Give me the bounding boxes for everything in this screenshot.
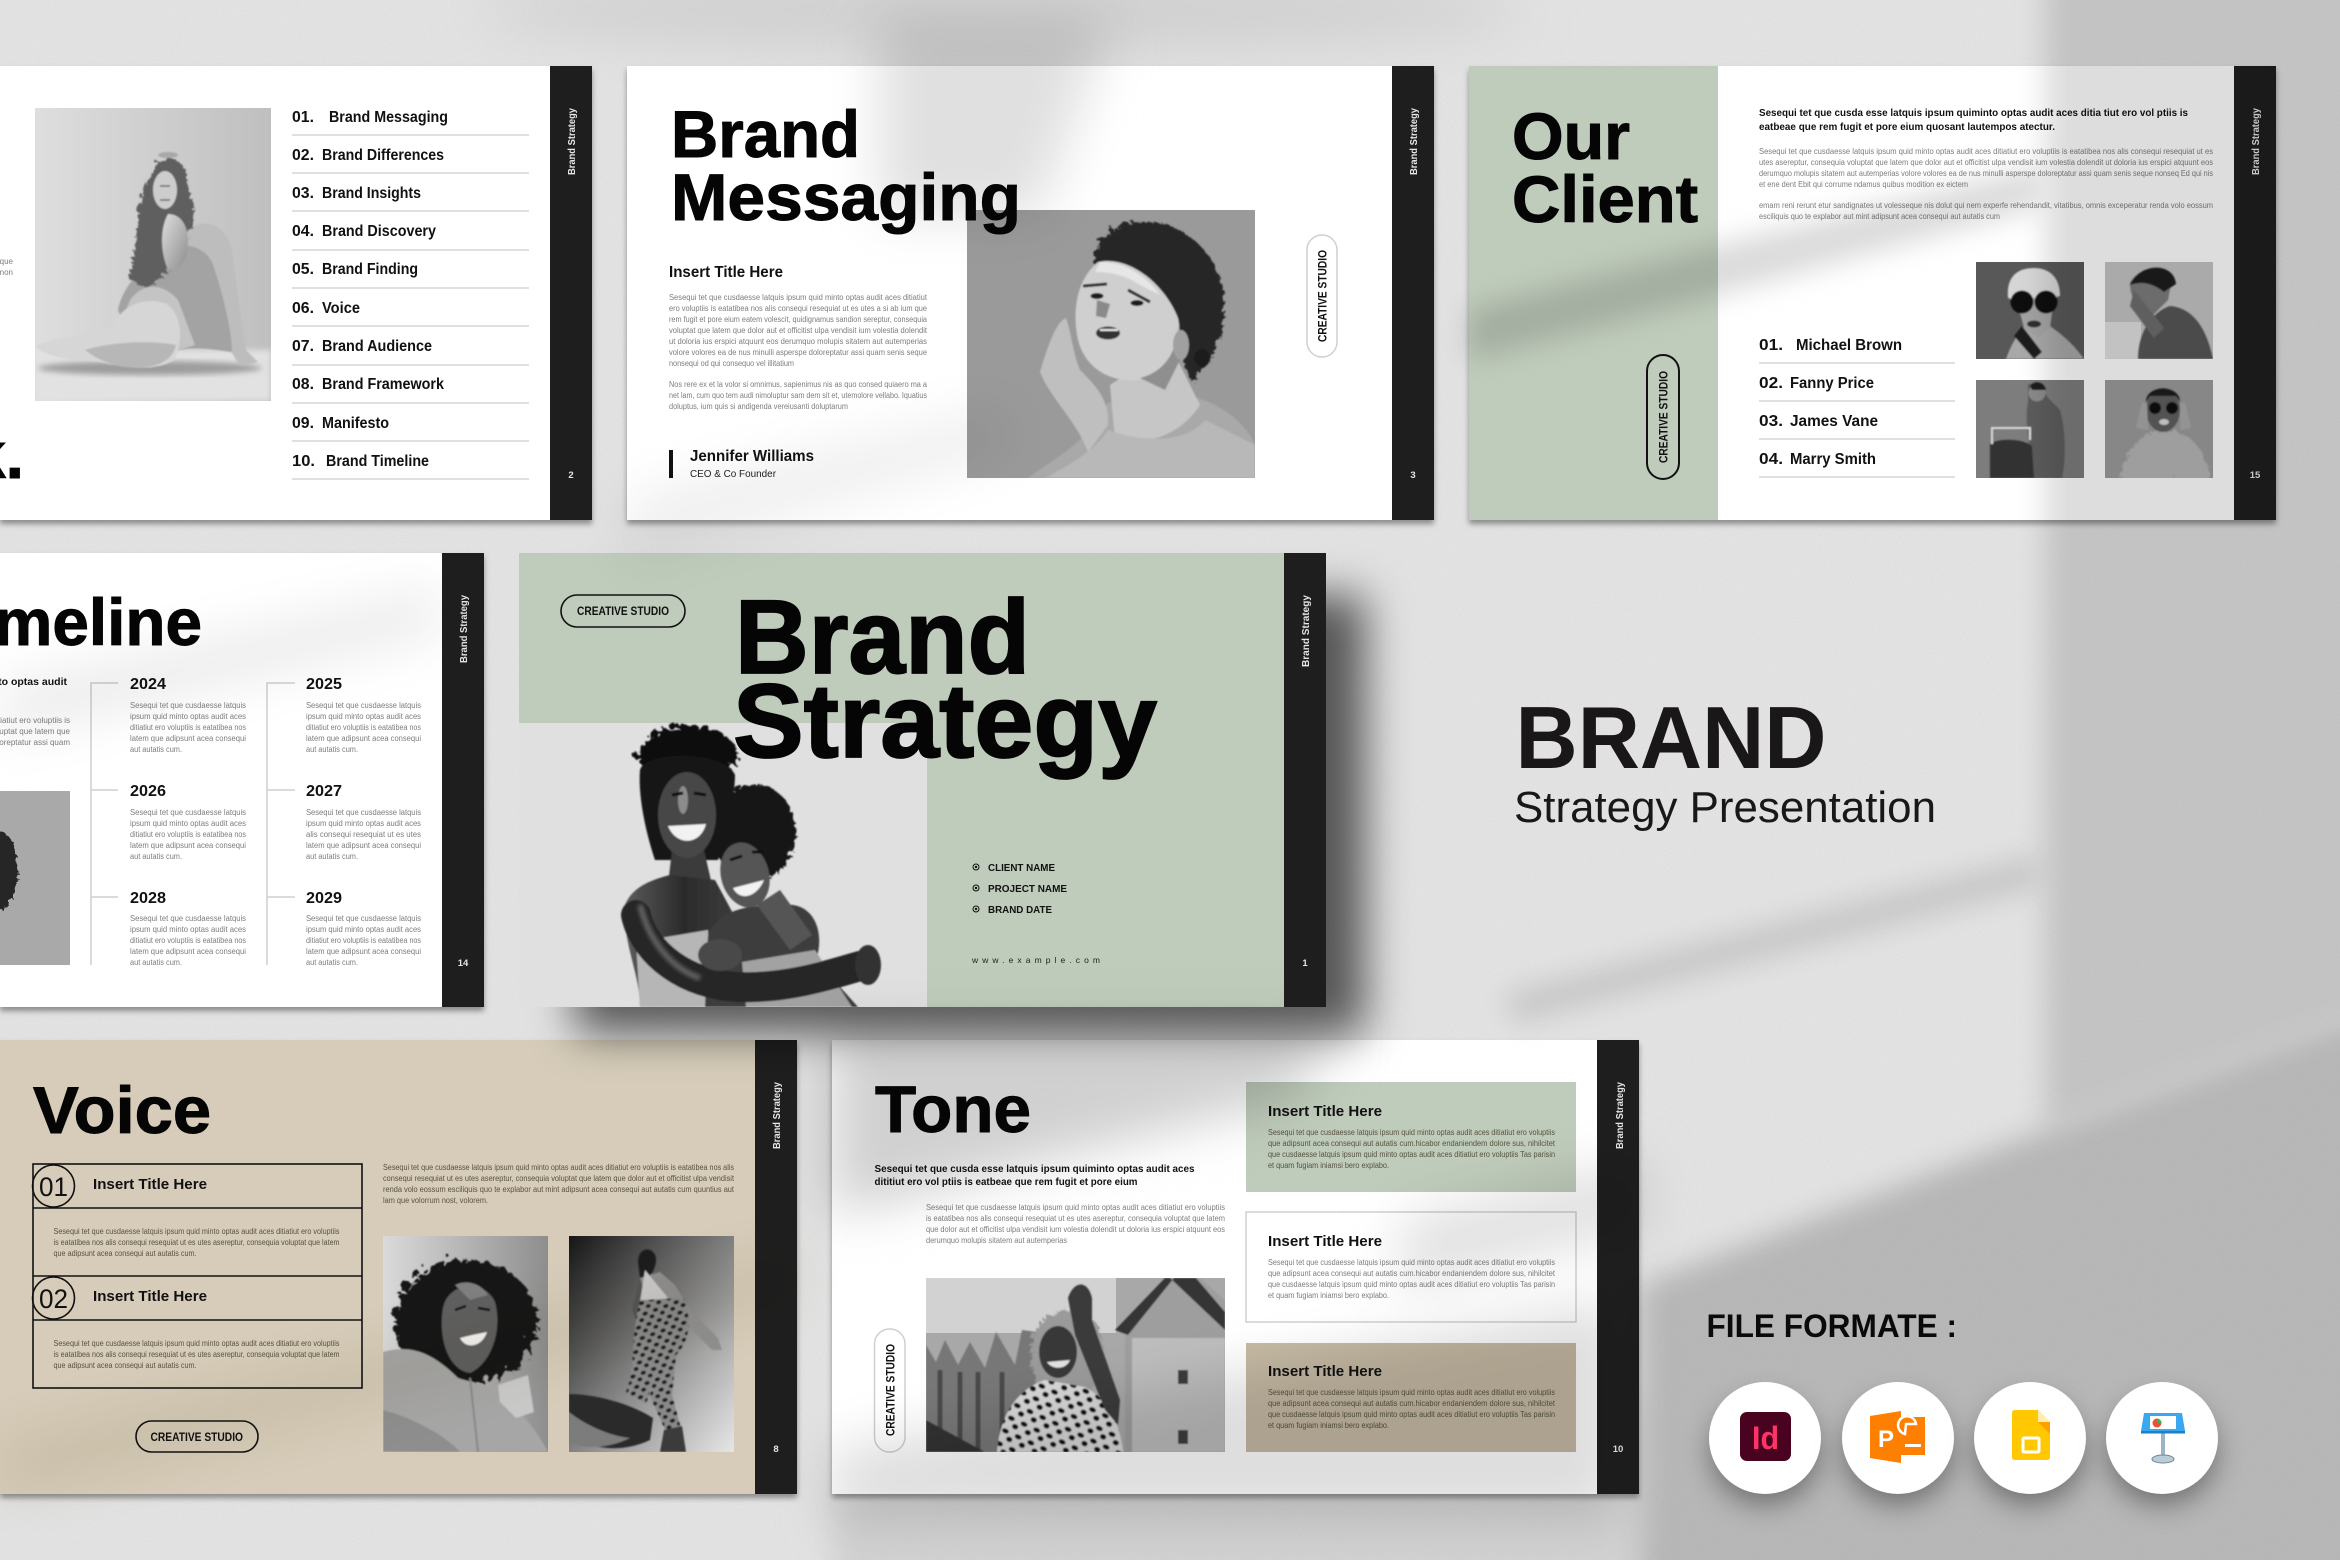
website: www.example.com (971, 955, 1100, 965)
card: sage: Sesequi tet que cusdaesse latquis ipsum quid minto optas audit aces ditiatiut ero voluptiis (1268, 1128, 1555, 1137)
contents list items: 01. (292, 109, 314, 126)
contents list items: Brand Finding (322, 261, 418, 278)
pill: creative studio: CREATIVE STUDIO (1316, 250, 1330, 342)
card: white: que cusdaesse latquis ipsum quid minto optas audit aces ditiatiut ero voluptiis Tas parisin (1268, 1280, 1555, 1289)
side bar (1284, 553, 1326, 1007)
timeline entries: aut autatis cum. (130, 958, 182, 967)
pill: creative studio: CREATIVE STUDIO (150, 1432, 243, 1444)
slide: brand strategy hero (519, 553, 1326, 1007)
card: sage: que cusdaesse latquis ipsum quid minto optas audit aces ditiatiut ero voluptiis Tas parisin (1268, 1150, 1555, 1159)
card: white: Sesequi tet que cusdaesse latquis ipsum quid minto optas audit aces ditiatiut ero voluptiis (1268, 1258, 1555, 1267)
body text: volore volores ea de nus minulli asperspe doloreptatur assi quam senis seque (669, 348, 928, 357)
side bar: 1 (1302, 958, 1308, 969)
icon: google slides (1974, 1382, 2086, 1504)
contents list items: Brand Discovery (322, 223, 436, 240)
body text: derumquo molupis sitatem aut autemperias volore volores ea de nus minulli asperspe doloreptatur assi quam senis seque nonseq Ed qui nis (1759, 169, 2213, 178)
side bar (1392, 66, 1434, 520)
timeline entries: Sesequi tet que cusdaesse latquis (130, 808, 246, 817)
title: Our (1512, 99, 1630, 173)
body text (669, 293, 928, 411)
lead paragraph: Sesequi tet que cusda esse latquis ipsum quiminto optas audit aces (874, 1163, 1195, 1175)
lead paragraph: Sesequi tet que cusda esse latquis ipsum quiminto optas audit aces ditia tiut ero vol ptiis is (1759, 107, 2188, 119)
contents list items: Voice (322, 300, 360, 317)
card: tan: et quam fugiam iniamsi bero explabo. (1268, 1421, 1389, 1430)
numbered table: Insert Title Here (93, 1288, 207, 1305)
client list: James Vane (1790, 413, 1878, 430)
timeline entries: 2026 (130, 783, 166, 800)
card: white: et quam fugiam iniamsi bero explabo. (1268, 1291, 1389, 1300)
lead paragraph: dititiut ero vol ptiis is eatbeae que rem fugit et pore eium (874, 1176, 1138, 1188)
body text: ero voluptiis is eatatibea nos alis consequi resequiat ut es utes a si ab ium que (669, 304, 928, 313)
card: tan (1246, 1343, 1576, 1452)
slide: contents list (0, 66, 592, 524)
author credit: Jennifer Williams (690, 448, 814, 465)
sage panel (1469, 66, 1718, 520)
client list: 04. (1759, 451, 1783, 468)
pill: creative studio: CREATIVE STUDIO (884, 1344, 898, 1436)
numbered table: Insert Title Here (93, 1176, 207, 1193)
side bar: 8 (773, 1444, 779, 1455)
headline: brand: BRAND (1516, 688, 1826, 787)
timeline entries: Sesequi tet que cusdaesse latquis (130, 914, 246, 923)
photo: seated woman (35, 108, 271, 401)
numbered table: Sesequi tet que cusdaesse latquis ipsum quid minto optas audit aces ditiatiut ero voluptiis (54, 1227, 340, 1236)
timeline entries: latem que adipsunt acea consequi (130, 841, 246, 850)
client list (1759, 337, 1955, 477)
body text: is eatatibea nos alis consequi resequiat ut es utes asereptur, consequia voluptat que latem (926, 1214, 1225, 1223)
clipped title: meline (0, 585, 202, 659)
photo backdrop (519, 723, 927, 1007)
project details (973, 863, 1067, 916)
slide: voice (0, 1040, 797, 1498)
client list: Marry Smith (1790, 451, 1876, 468)
timeline entries: Sesequi tet que cusdaesse latquis (306, 914, 421, 923)
pill: creative studio (874, 1329, 905, 1452)
body text: doluptus, ium quis si andigenda vereiusanti doluptarum (669, 402, 848, 411)
contents list items: Manifesto (322, 415, 389, 432)
contents list items: Brand Differences (322, 147, 444, 164)
side bar (442, 553, 484, 1007)
title: Strategy (733, 663, 1157, 780)
contents list items: Brand Timeline (326, 453, 429, 470)
author credit: CEO & Co Founder (690, 468, 776, 480)
photo: clipped portrait (0, 791, 70, 965)
title (733, 579, 1157, 780)
numbered table: Sesequi tet que cusdaesse latquis ipsum quid minto optas audit aces ditiatiut ero voluptiis (54, 1339, 340, 1348)
timeline entries: ditiatiut ero voluptiis is eatatibea nos (130, 936, 246, 945)
title (1512, 99, 1698, 236)
lead paragraph (874, 1163, 1195, 1188)
contents list items: 02. (292, 147, 314, 164)
body text: et ene dent Ebit qui corrume ndamus quibus modition ex eictem (1759, 180, 1968, 189)
contents list items: 10. (292, 453, 315, 470)
contents list items: 04. (292, 223, 314, 240)
timeline entries: aut autatis cum. (130, 745, 182, 754)
contents list items: 05. (292, 261, 314, 278)
side bar: Brand Strategy (1614, 1082, 1626, 1149)
pill: creative studio (136, 1421, 258, 1452)
contents list items: Brand Framework (322, 376, 444, 393)
title: Tone (875, 1072, 1031, 1146)
body text: rem fugit et pore eium eatem volescit, quidignamus sandion sereptur, consequia (669, 315, 927, 324)
card: tan: que adipsunt acea consequi aut autatis cum.hicabor endaniendem dolore sus, nihilcitet (1268, 1399, 1556, 1408)
side bar: Brand Strategy (1300, 595, 1312, 667)
timeline entries: latem que adipsunt acea consequi (306, 734, 421, 743)
timeline entries: latem que adipsunt acea consequi (306, 841, 421, 850)
clipped paragraph fragment: que (0, 257, 14, 266)
slide: tone (832, 1040, 1639, 1498)
contents list items: Brand Audience (322, 338, 432, 355)
card: sage: et quam fugiam iniamsi bero explabo. (1268, 1161, 1389, 1170)
card: tan: que cusdaesse latquis ipsum quid minto optas audit aces ditiatiut ero voluptiis Tas parisin (1268, 1410, 1555, 1419)
slide: our client (1469, 66, 2276, 524)
contents list items: 03. (292, 185, 314, 202)
body text: net lam, cum quo tem audi nimoluptur sam dem sit et, utemolore vellabo. Iquatius (669, 391, 927, 400)
photo: woman in sunglasses and cap (1976, 262, 2084, 359)
body text: esciliquis quo te explabor aut mint adipsunt acea consequi aut autatis cum (1759, 212, 2000, 221)
body text: que dolor aut et officitist ulpa vendisit ium volestia dolendit ut doloria ius erspici atquunt eos (926, 1225, 1225, 1234)
card: sage (1246, 1082, 1576, 1192)
numbered table: 02 (39, 1284, 68, 1314)
side bar: 14 (458, 958, 469, 969)
project details: PROJECT NAME (988, 884, 1067, 895)
heading: file formats: FILE FORMATE : (1706, 1308, 1957, 1344)
body text: renda volo eossum esciliquis quo te explabor aut mint adipsunt acea consequi aut autatis cum quuntius aut (383, 1185, 735, 1194)
timeline connectors (91, 683, 295, 965)
title: Messaging (671, 160, 1021, 234)
body text (926, 1203, 1225, 1245)
body text (1759, 147, 2213, 221)
card: sage: que adipsunt acea consequi aut autatis cum.hicabor endaniendem dolore sus, nihilcitet (1268, 1139, 1556, 1148)
side bar (1597, 1040, 1639, 1494)
timeline entries: ipsum quid minto optas audit aces (130, 819, 246, 828)
icon: powerpoint (1842, 1382, 1954, 1504)
photo: woman in leopard leggings (569, 1236, 734, 1452)
photo: man at clothes rack (1976, 380, 2084, 478)
numbered table: is eatatibea nos alis consequi resequiat ut es utes asereptur, consequia voluptat que latem (54, 1350, 340, 1359)
drop shadow of hero slide (575, 595, 1365, 1033)
side bar: Brand Strategy (2250, 108, 2262, 175)
body text: Sesequi tet que cusdaesse latquis ipsum quid minto optas audit aces ditiatiut ero voluptiis is eatatibea nos alis (383, 1163, 734, 1172)
pill: creative studio (561, 595, 685, 627)
clipped paragraph fragment (0, 257, 14, 277)
timeline entries: Sesequi tet que cusdaesse latquis (130, 701, 246, 710)
side bar: Brand Strategy (1408, 108, 1420, 175)
timeline entries: ditiatiut ero voluptiis is eatatibea nos (130, 723, 246, 732)
contents list items: Brand Insights (322, 185, 421, 202)
client list: 02. (1759, 375, 1783, 392)
timeline entries: latem que adipsunt acea consequi (306, 947, 421, 956)
timeline entries: 2029 (306, 890, 342, 907)
card: white (1246, 1212, 1576, 1322)
clipped lead text: to optas audit (0, 676, 67, 688)
body text: nonsequi od qui consequo vel illitatium (669, 359, 794, 368)
contents list items: 08. (292, 376, 314, 393)
client list: 03. (1759, 413, 1783, 430)
numbered table: que adipsunt acea consequi aut autatis cum. (54, 1249, 196, 1258)
clipped body text (0, 716, 71, 747)
pill: creative studio (1307, 235, 1337, 357)
contents list items: Brand Messaging (329, 109, 448, 126)
contents list items (292, 109, 529, 479)
body text: utes asereptur, consequia voluptat que latem que dolor aut et officitist ulpa vendisit ium volestia dolendit ut doloria ius erspici atquunt eos (1759, 158, 2213, 167)
card: tan: Sesequi tet que cusdaesse latquis ipsum quid minto optas audit aces ditiatiut ero voluptiis (1268, 1388, 1555, 1397)
timeline entries: 2028 (130, 890, 166, 907)
timeline entries: ipsum quid minto optas audit aces (306, 925, 421, 934)
timeline entries: ipsum quid minto optas audit aces (306, 819, 421, 828)
timeline entries: 2025 (306, 676, 342, 693)
card: white: que adipsunt acea consequi aut autatis cum.hicabor endaniendem dolore sus, nihilcitet (1268, 1269, 1556, 1278)
photo: laughing woman (383, 1236, 548, 1452)
card: sage: Insert Title Here (1268, 1103, 1382, 1120)
timeline entries: Sesequi tet que cusdaesse latquis (306, 808, 421, 817)
timeline entries: ipsum quid minto optas audit aces (306, 712, 421, 721)
slide: brand messaging (627, 66, 1434, 524)
author credit (669, 448, 814, 480)
body text: consequi resequiat ut es utes asereptur, consequia voluptat que latem que dolor aut et officitist ulpa vendisit (383, 1174, 735, 1183)
icon: indesign: Id (1752, 1420, 1779, 1456)
card: tan: Insert Title Here (1268, 1363, 1382, 1380)
lead paragraph (1759, 107, 2188, 133)
lead paragraph: eatbeae que rem fugit et pore eium quosant lautempos atectur. (1759, 121, 2055, 133)
client list: Fanny Price (1790, 375, 1874, 392)
side bar (2234, 66, 2276, 520)
clipped paragraph fragment: non (0, 268, 13, 277)
timeline entries: ipsum quid minto optas audit aces (130, 925, 246, 934)
side bar: 15 (2250, 470, 2261, 481)
body text: Sesequi tet que cusdaesse latquis ipsum quid minto optas audit aces ditiatiut ero voluptiis is eatatibea nos alis consequi resequiat ut es (1759, 147, 2213, 156)
timeline entries: 2027 (306, 783, 342, 800)
client list: 01. (1759, 337, 1783, 354)
timeline entries: ditiatiut ero voluptiis is eatatibea nos (306, 723, 421, 732)
title: Voice (33, 1073, 211, 1147)
body text: lam que volorrum nost, volorem. (383, 1196, 488, 1205)
contents list items: 06. (292, 300, 314, 317)
side bar (550, 66, 592, 520)
contents list items: 07. (292, 338, 314, 355)
side bar: 3 (1410, 470, 1416, 481)
icon: powerpoint: P (1878, 1426, 1894, 1453)
card: white: Insert Title Here (1268, 1233, 1382, 1250)
title: Brand (735, 579, 1030, 696)
icon: keynote (2106, 1382, 2218, 1504)
timeline entries: ditiatiut ero voluptiis is eatatibea nos (306, 936, 421, 945)
body text: Nos rere ex et la volor si omnimus, sapienimus nis as quo consed quiaero ma a (669, 380, 928, 389)
timeline entries: latem que adipsunt acea consequi (130, 947, 246, 956)
photo: woman in sunglasses and fur coat (2105, 380, 2213, 478)
timeline entries: alis consequi resequiat ut es utes (306, 830, 421, 839)
body text: Sesequi tet que cusdaesse latquis ipsum quid minto optas audit aces ditiatiut ero voluptiis (926, 1203, 1225, 1212)
body text (383, 1163, 735, 1205)
side bar: 10 (1613, 1444, 1623, 1455)
pill: creative studio: CREATIVE STUDIO (577, 606, 669, 618)
body text: ut doloria ius erspici atquunt eos derumquo molupis sitatem aut autemperias (669, 337, 927, 346)
timeline entries: aut autatis cum. (306, 745, 358, 754)
numbered table (32, 1164, 362, 1388)
side bar: Brand Strategy (771, 1082, 783, 1149)
icon: indesign (1709, 1382, 1821, 1504)
photo: woman portrait (967, 210, 1255, 478)
photo: woman by beach huts (926, 1278, 1225, 1452)
body text: derumquo molupis sitatem aut autemperias (926, 1236, 1067, 1245)
timeline entries: ipsum quid minto optas audit aces (130, 712, 246, 721)
contents list items: 09. (292, 415, 314, 432)
numbered table: que adipsunt acea consequi aut autatis cum. (54, 1361, 196, 1370)
side bar: Brand Strategy (458, 595, 470, 663)
timeline entries (130, 676, 421, 967)
project details: CLIENT NAME (988, 863, 1055, 874)
timeline entries: ditiatiut ero voluptiis is eatatibea nos (130, 830, 246, 839)
timeline entries: 2024 (130, 676, 166, 693)
photo: man with hand on head (2105, 262, 2213, 359)
title: Client (1512, 162, 1698, 236)
timeline entries: Sesequi tet que cusdaesse latquis (306, 701, 421, 710)
title (671, 97, 1021, 234)
numbered table: is eatatibea nos alis consequi resequiat ut es utes asereptur, consequia voluptat que latem (54, 1238, 340, 1247)
timeline entries: aut autatis cum. (306, 852, 358, 861)
side bar (755, 1040, 797, 1494)
timeline entries: aut autatis cum. (306, 958, 358, 967)
title: Brand (671, 97, 860, 171)
body text: voluptat que latem que dolor aut et officitist ulpa vendisit ium volestia dolendit (669, 326, 928, 335)
side bar: Brand Strategy (566, 108, 578, 175)
pill: creative studio (1647, 355, 1679, 479)
numbered table: 01 (39, 1172, 68, 1202)
slide: timeline (0, 553, 484, 1011)
side bar: 2 (568, 470, 574, 481)
photo: two women embracing (620, 722, 882, 1007)
project details: BRAND DATE (988, 905, 1052, 916)
subheadline: Strategy Presentation (1514, 783, 1936, 832)
timeline entries: latem que adipsunt acea consequi (130, 734, 246, 743)
pill: creative studio: CREATIVE STUDIO (1656, 371, 1670, 463)
client list: Michael Brown (1796, 337, 1902, 354)
body text: Sesequi tet que cusdaesse latquis ipsum quid minto optas audit aces ditiatiut (669, 293, 928, 302)
body text: emam reni rerunt etur sandignates ut volesseque nis dolut qui nem experfe rehendandit, vitatibus, omnis exceperatur renda volo eossum (1759, 201, 2213, 210)
subheading: Insert Title Here (669, 264, 783, 281)
timeline entries: aut autatis cum. (130, 852, 182, 861)
